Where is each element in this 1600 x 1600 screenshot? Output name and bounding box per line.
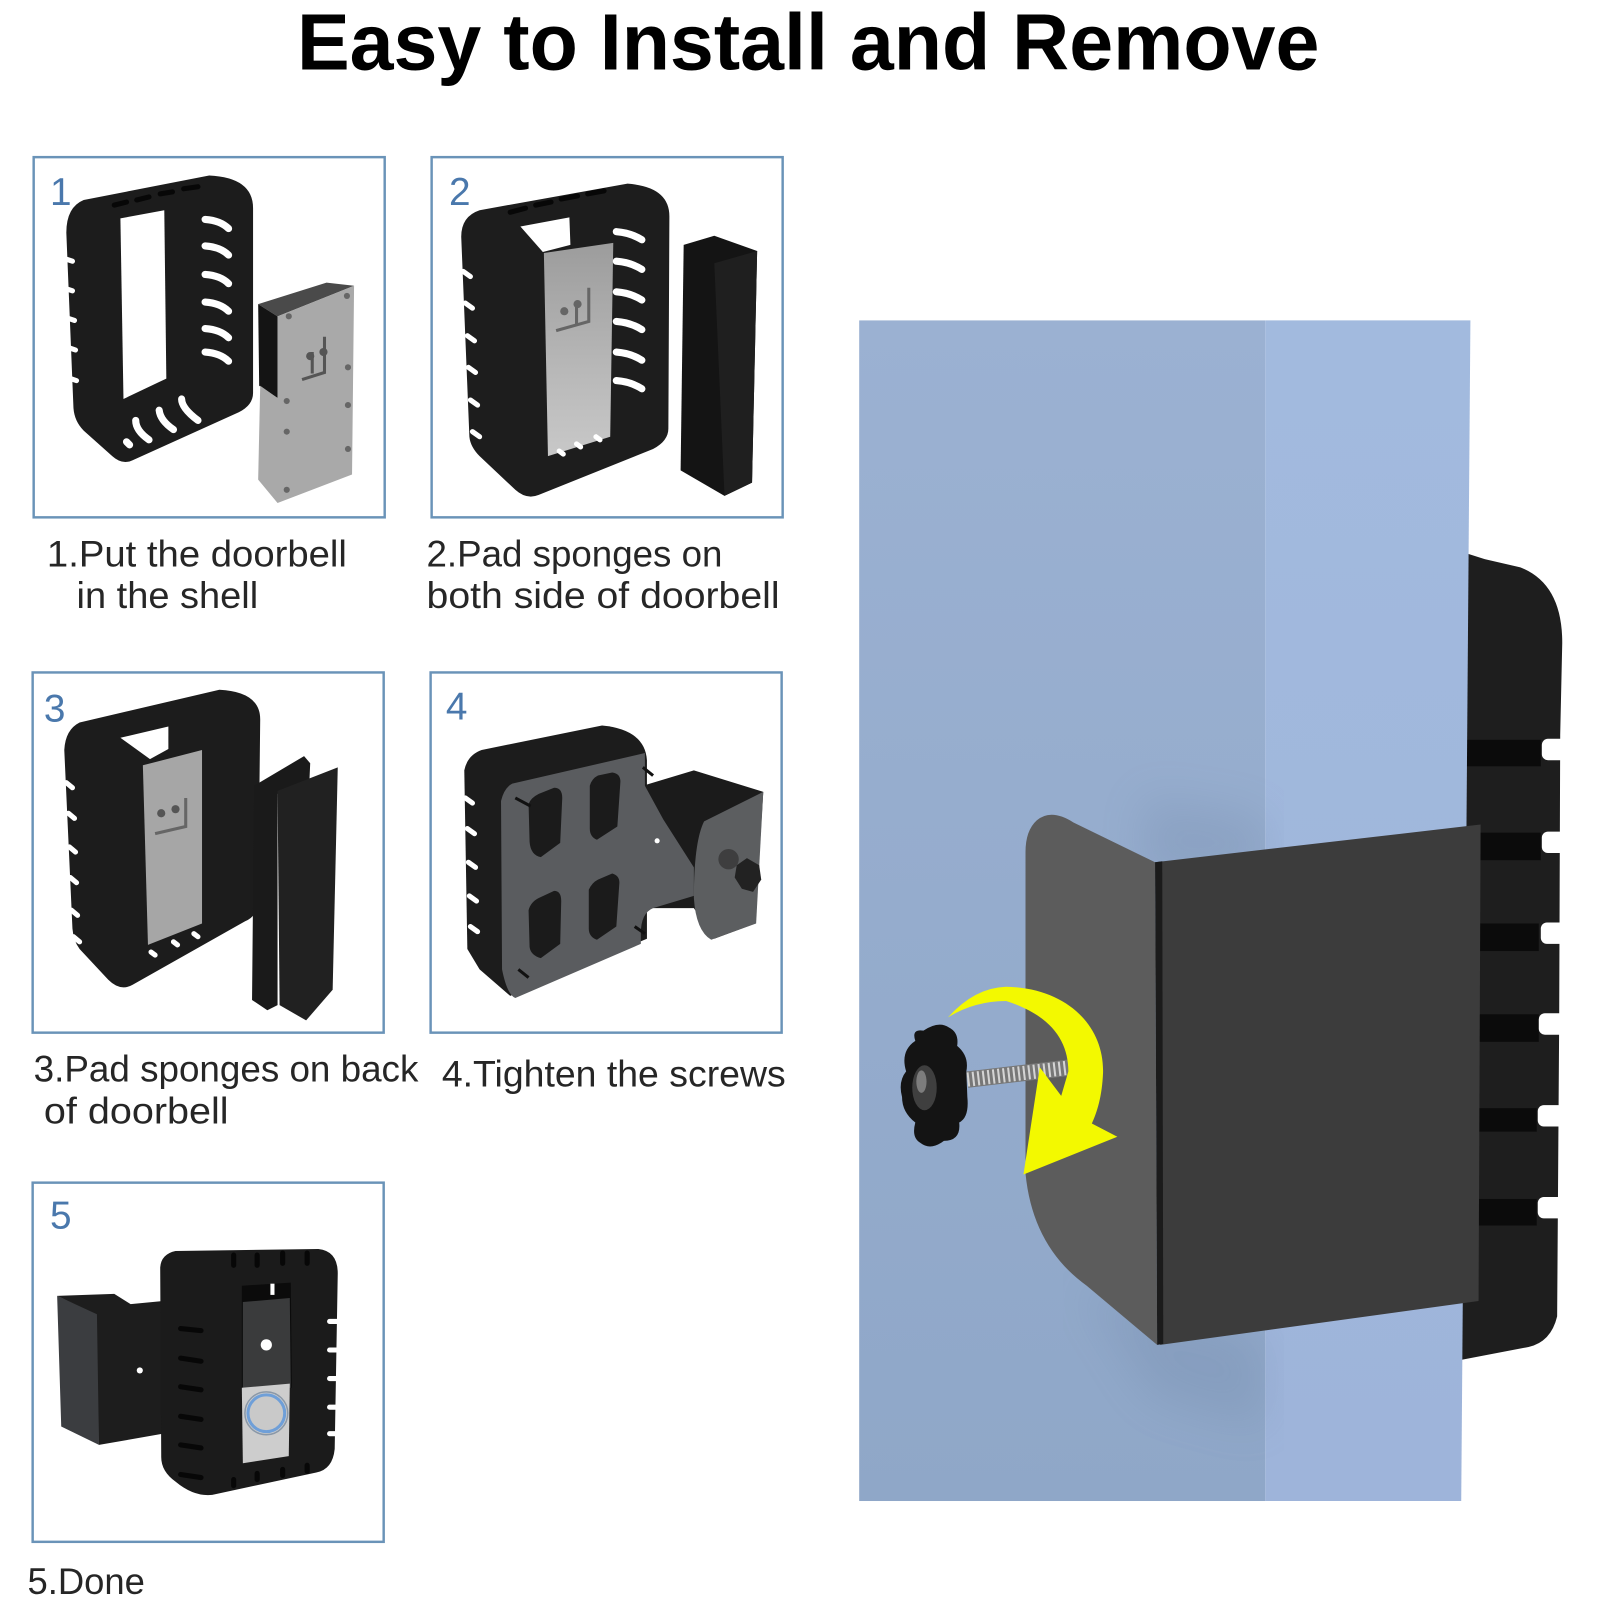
shadow on wall xyxy=(1082,796,1265,1429)
panel: main installed view xyxy=(859,320,1568,1501)
panel: step 2 xyxy=(432,157,783,517)
panel: step 3 xyxy=(33,672,384,1033)
knob xyxy=(901,1025,968,1146)
wall right face xyxy=(1265,320,1470,1501)
icon: shell with bracket, back view xyxy=(464,726,763,998)
caption: step 2 xyxy=(427,533,780,616)
caption: step 1: in the shell xyxy=(77,575,258,616)
bracket corner edge xyxy=(1155,861,1163,1345)
icon: sponges xyxy=(252,756,338,1020)
caption: step 1: 1.Put the doorbell xyxy=(47,533,347,574)
panel: step 1 xyxy=(34,157,385,517)
caption: step 1 xyxy=(47,533,347,616)
panel: step 4 xyxy=(431,672,782,1033)
wall left face xyxy=(859,320,1265,1501)
step number 1: 1 xyxy=(50,171,72,214)
screw xyxy=(967,1067,1071,1080)
bracket side wing xyxy=(1026,815,1157,1345)
title: Easy to Install and Remove xyxy=(297,0,1319,86)
bracket front face xyxy=(1155,824,1481,1345)
icon: finished doorbell mount xyxy=(57,1249,338,1495)
caption: step 2: 2.Pad sponges on xyxy=(427,533,722,574)
caption: step 3: of doorbell xyxy=(44,1090,229,1131)
step number 2: 2 xyxy=(449,171,471,214)
arrow: tighten direction xyxy=(948,987,1117,1174)
icon: doorbell back xyxy=(258,283,354,503)
icon: shell with opening xyxy=(66,176,253,462)
panel: step 5 xyxy=(33,1183,384,1542)
caption: step 3 xyxy=(34,1049,419,1131)
icon: shell with doorbell xyxy=(461,184,669,497)
caption: step 2: both side of doorbell xyxy=(427,575,780,616)
icon: sponge xyxy=(681,236,757,496)
step number 3: 3 xyxy=(44,687,65,730)
caption: step 3: 3.Pad sponges on back xyxy=(34,1049,419,1090)
caption: step 4: 4.Tighten the screws xyxy=(442,1054,786,1095)
step number 4: 4 xyxy=(446,685,467,728)
doorbell shell behind wall xyxy=(1459,551,1568,1360)
step number 5: 5 xyxy=(50,1195,72,1238)
icon: shell with doorbell xyxy=(64,690,260,987)
